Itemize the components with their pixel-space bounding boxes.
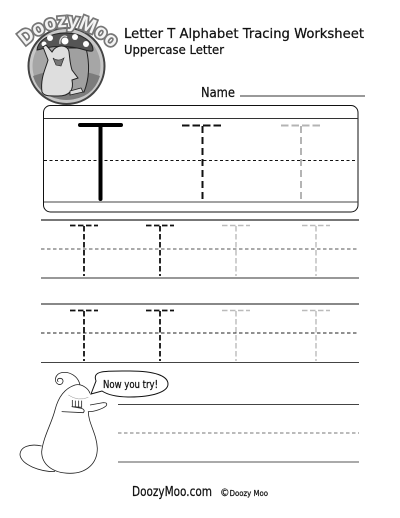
big solid letter T (80, 125, 121, 199)
letters T row 1 (70, 226, 330, 276)
title: Letter T Alphabet Tracing Worksheet (124, 26, 364, 42)
panel: model letter tracing box (44, 106, 358, 212)
footer copyright: ©Doozy Moo (220, 486, 268, 499)
logo: DoozyMoo mascot badge (15, 14, 118, 105)
logo wordmark: DoozyMoo (15, 14, 118, 48)
footer website: DoozyMoo.com (132, 485, 212, 500)
letters T row 2 (70, 310, 330, 361)
speech bubble (91, 371, 168, 397)
tracing row 2 (41, 304, 359, 362)
handwriting practice lines (118, 404, 359, 462)
name field: Name (201, 86, 235, 101)
speech bubble: Now you try! (103, 379, 158, 391)
tracing row 1 (41, 220, 359, 278)
dashed grey letter T (281, 126, 321, 199)
mascot: beaver pointing (20, 372, 107, 473)
dashed black letter T (182, 126, 223, 199)
subtitle: Uppercase Letter (124, 43, 224, 57)
